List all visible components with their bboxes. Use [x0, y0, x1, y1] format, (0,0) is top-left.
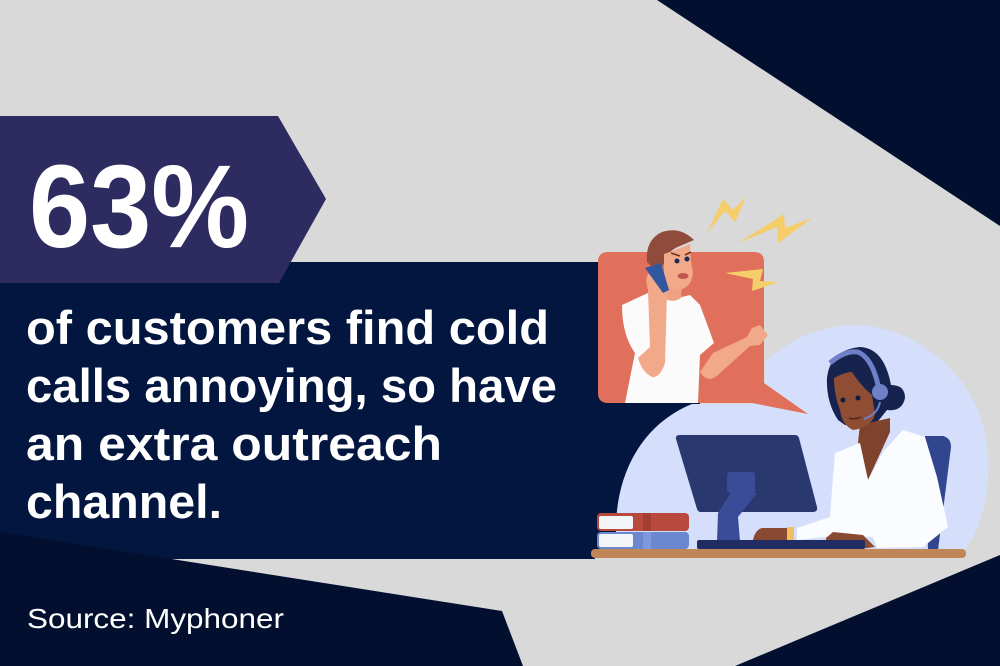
- stack of books: [597, 513, 689, 549]
- computer monitor: [676, 435, 865, 549]
- panel: statistic arrow banner: [0, 116, 326, 283]
- icon: light blue backdrop blob: [616, 325, 988, 549]
- icon: angry man on phone: [622, 230, 768, 403]
- agent head and hair: [827, 347, 905, 480]
- text block: description: an extra outreach: [26, 417, 442, 470]
- panel: navy text background: [0, 262, 700, 559]
- chair: [925, 436, 951, 550]
- text block: description: of customers find cold: [26, 301, 549, 354]
- source note: Source: Myphoner: [27, 603, 284, 634]
- agent hands: [753, 527, 875, 549]
- text block: description: calls annoying, so have: [26, 359, 557, 412]
- illustration: call centre agent at desk: [591, 347, 966, 558]
- text block: description: channel.: [26, 475, 222, 528]
- speech bubble: [598, 252, 808, 414]
- desk: [591, 549, 966, 558]
- icon: lightning bolts: [707, 197, 812, 291]
- heading: statistic: 63%: [29, 141, 249, 273]
- text block: description: [26, 301, 557, 528]
- agent blouse: [797, 430, 948, 548]
- illustration: angry caller speech bubble: [598, 197, 812, 414]
